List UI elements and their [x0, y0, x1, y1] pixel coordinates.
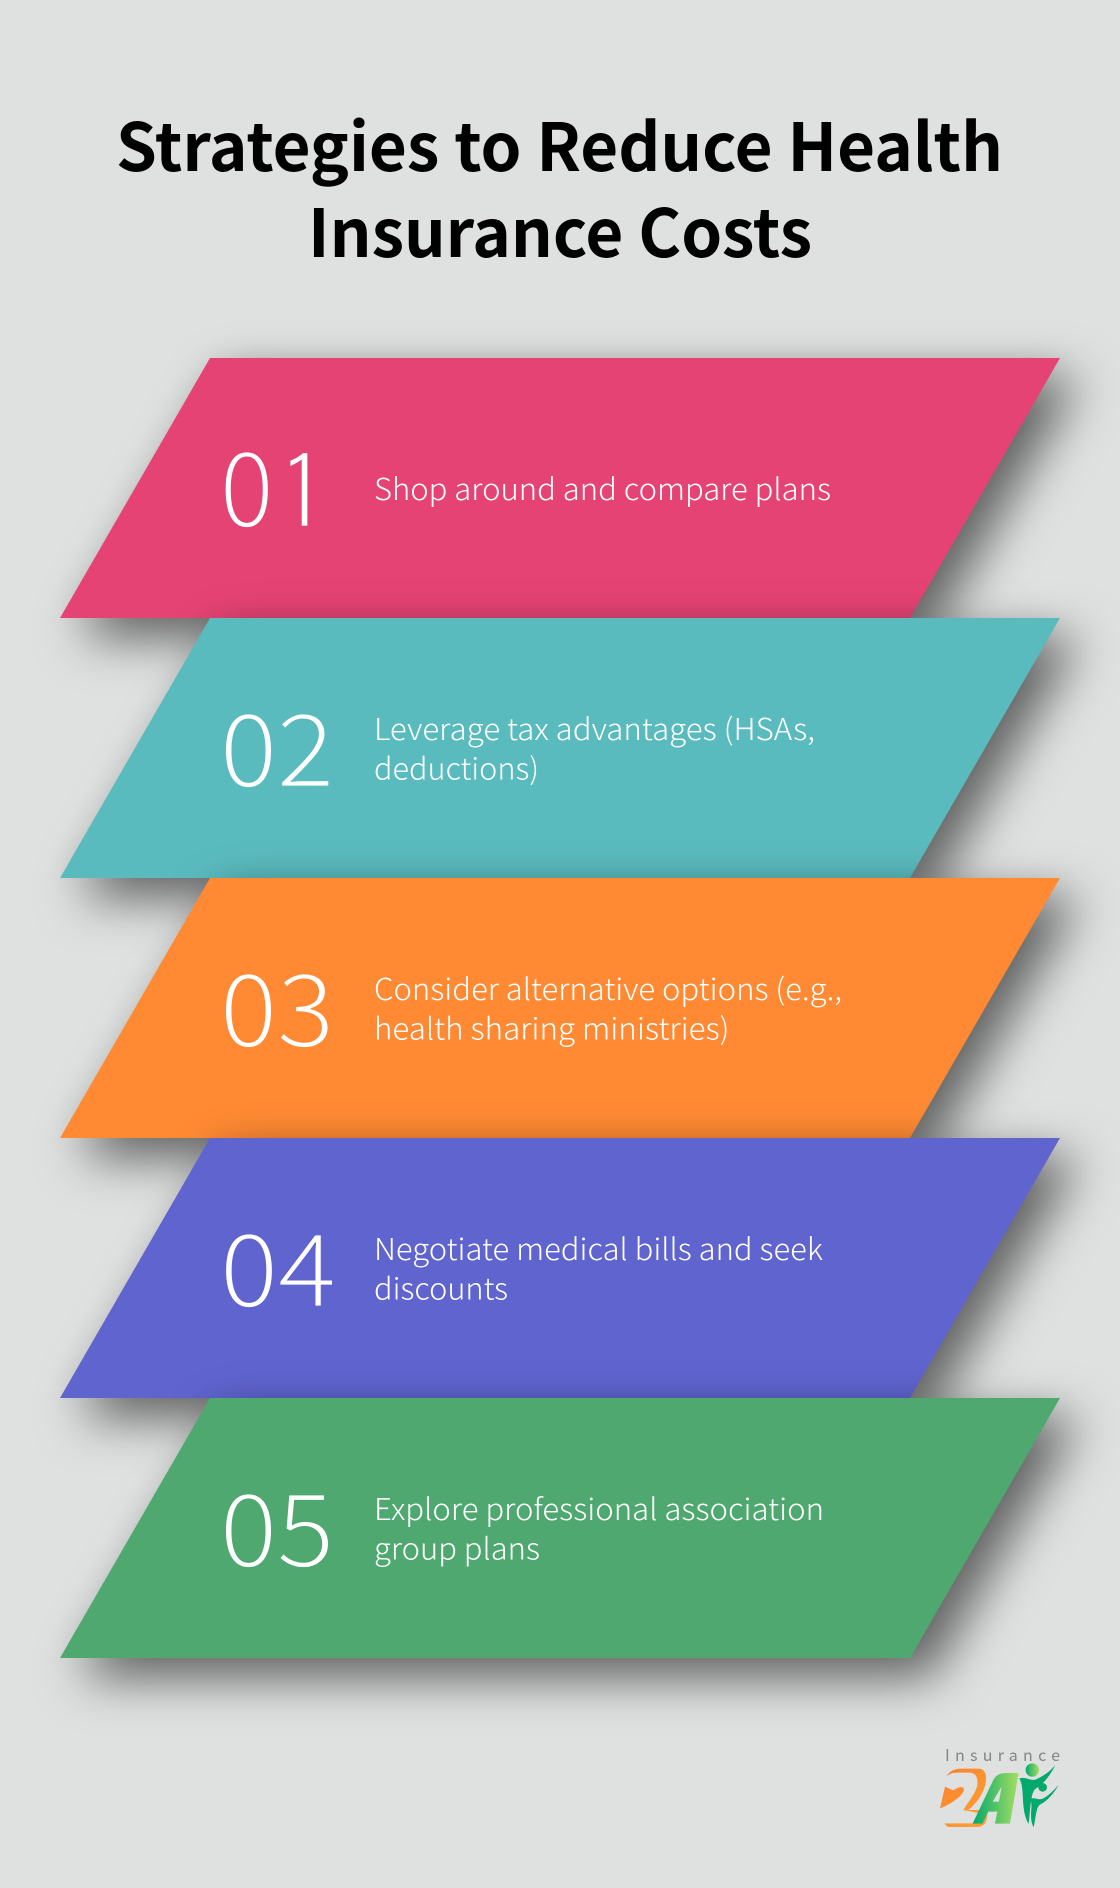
title: Insurance Costs	[308, 181, 812, 277]
panel: step 02	[60, 618, 1060, 878]
icon: green A	[973, 1773, 1019, 1824]
text: step 05: Explore professional association	[374, 1485, 824, 1529]
number 05: 05	[220, 1450, 334, 1595]
text: step 04: discounts	[374, 1264, 508, 1308]
number 01: 0	[220, 410, 274, 555]
number 01: 1	[276, 438, 330, 546]
number 02: 02	[220, 670, 334, 815]
text: step 05: group plans	[374, 1524, 540, 1568]
text: step 02: deductions)	[374, 744, 539, 788]
text: step 02	[374, 705, 815, 788]
icon: orange 2 with heart	[940, 1769, 987, 1827]
panel: step 04	[60, 1138, 1060, 1398]
text: step 03: health sharing ministries)	[374, 1004, 730, 1048]
title: Strategies to Reduce Health	[116, 95, 1003, 191]
title	[116, 95, 1003, 277]
text: step 04: Negotiate medical bills and seek	[374, 1225, 823, 1269]
text: step 03: Consider alternative options (e.g.,	[374, 965, 842, 1009]
panel: step 01	[60, 358, 1060, 618]
text: step 04	[374, 1225, 823, 1308]
text: step 05	[374, 1485, 824, 1568]
icon: people figures	[1019, 1763, 1059, 1827]
logo: Insurance 2Ai: Insurance	[945, 1742, 1060, 1766]
panel: step 03	[60, 878, 1060, 1138]
number 04: 04	[220, 1190, 336, 1335]
text: step 02: Leverage tax advantages (HSAs,	[374, 705, 815, 749]
panel: step 05	[60, 1398, 1060, 1658]
text: step 03	[374, 965, 842, 1048]
text: step 01: Shop around and compare plans	[374, 465, 831, 509]
logo: Insurance 2Ai	[940, 1742, 1060, 1827]
number 03: 03	[220, 930, 334, 1075]
